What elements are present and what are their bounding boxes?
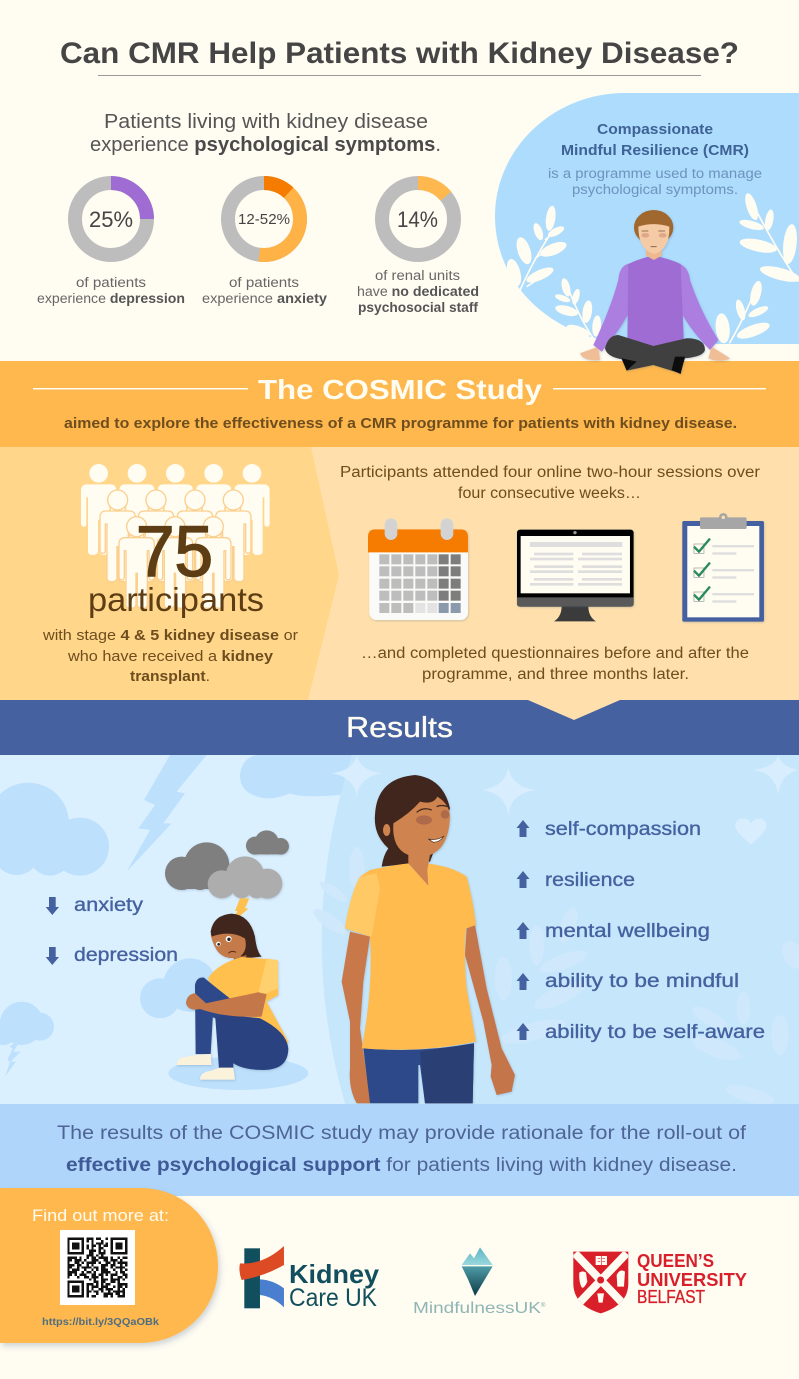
heading: CMR: is a programme used to manage [548, 166, 762, 181]
donut chart: 25% depression [37, 183, 185, 306]
study aim text: aimed to explore the effectiveness of a CMR programme for patients with kidney disease. [64, 415, 737, 432]
heading: CMR: Mindful Resilience (CMR) [561, 143, 749, 159]
panel: find out more [0, 1188, 218, 1343]
right background stars, heart and leaves [310, 755, 799, 1109]
find out more text: Find out more at: [32, 1207, 169, 1225]
heading: CMR: Compassionate [597, 122, 713, 138]
illustration: happy woman [342, 775, 515, 1103]
questionnaires text: …and completed questionnaires before and after the [361, 645, 749, 662]
list: increased outcomes: mental wellbeing [545, 921, 710, 942]
participants description: with stage 4 & 5 kidney disease or [42, 627, 298, 644]
participants description: transplant. [130, 668, 210, 685]
heading: psychological symptoms: experience psychological symptoms. [90, 134, 441, 156]
left background clouds and lightning [0, 755, 367, 1090]
donut chart: 12-52% anxiety: of patients [229, 275, 299, 290]
donut chart: 14% renal units: 14% [397, 207, 438, 232]
knee thigh [200, 978, 241, 1018]
back shin [195, 978, 213, 1054]
participants description: who have received a kidney [67, 648, 274, 665]
QR code [60, 1230, 135, 1305]
storm clouds [165, 830, 289, 899]
donut chart: 14% renal units: psychosocial staff [358, 300, 479, 315]
list: increased outcomes: resilience [545, 870, 635, 891]
hair [634, 210, 673, 245]
list: decreased outcomes [46, 895, 178, 966]
heading: psychological symptoms [90, 111, 441, 156]
icon: up arrow [516, 973, 530, 990]
donut chart: 25% depression: of patients [76, 275, 146, 290]
sessions text: Participants attended four online two-hour sessions over [340, 464, 760, 481]
list: decreased outcomes: anxiety [74, 895, 144, 916]
list: increased outcomes: ability to be mindful [545, 971, 739, 992]
questionnaires text: programme, and three months later. [422, 666, 689, 683]
icon: down arrow [46, 897, 59, 915]
icon: calendar [368, 518, 468, 620]
hands [580, 347, 600, 360]
donut chart: 14% renal units: of renal units [375, 268, 460, 283]
donut chart: 12-52% anxiety [202, 183, 328, 306]
logo: MindfulnessUK: ® [541, 1302, 546, 1309]
number: 75: 75 [136, 513, 213, 592]
panel: results [0, 755, 799, 1109]
panel: conclusion: effective psychological support for patients living with kidney disease. [66, 1155, 737, 1176]
icon: computer monitor [517, 530, 634, 621]
list: increased outcomes: self-compassion [545, 819, 701, 840]
logo: MindfulnessUK: MindfulnessUK [413, 1300, 541, 1317]
arm [186, 992, 267, 1017]
arms [593, 263, 633, 352]
blue blob background [495, 93, 799, 344]
main leg [215, 1013, 288, 1070]
heading: CMR: psychological symptoms. [572, 182, 738, 197]
icon: up arrow [516, 1023, 530, 1040]
logo: Kidney Care UK [239, 1246, 380, 1312]
band: Results heading [0, 700, 799, 755]
heading: The COSMIC Study: The COSMIC Study [258, 374, 542, 405]
icon: leaf sprigs [504, 192, 799, 344]
lightning bolt [232, 898, 249, 923]
face [638, 224, 669, 254]
donut chart: 12-52% anxiety: experience anxiety [202, 291, 328, 306]
illustration: meditating man [580, 210, 730, 374]
torso [627, 256, 684, 347]
heading: CMR [548, 122, 762, 197]
donut chart: 14% renal units: have no dedicated [357, 284, 479, 299]
shirt [208, 957, 288, 1048]
logo: Queen's University Belfast: BELFAST [637, 1287, 705, 1307]
panel: conclusion [0, 1104, 799, 1196]
title: Can CMR Help Patients with Kidney Disease? [60, 37, 739, 70]
legs [605, 335, 705, 373]
icon: down arrow [46, 947, 59, 965]
list: increased outcomes [516, 819, 765, 1043]
icon: up arrow [516, 871, 530, 888]
logo: Kidney Care UK: Care UK [289, 1284, 377, 1312]
donut chart: 25% depression: 25% [89, 207, 133, 232]
icon: up arrow [516, 820, 530, 837]
illustration: distressed woman under clouds [165, 830, 289, 1080]
panel: programme sessions [340, 464, 764, 683]
icon: crowd of people [81, 464, 270, 608]
panel: psychological symptoms [37, 111, 479, 315]
panel: conclusion: The results of the COSMIC study may provide rationale for the roll-out of [57, 1123, 747, 1144]
URL: https://bit.ly/3QQaOBk [42, 1316, 159, 1328]
band: Results heading: Results [346, 712, 453, 744]
logo: Queen's University Belfast: UNIVERSITY [637, 1270, 747, 1290]
donut chart: 14% renal units [357, 183, 479, 315]
logo: Queen's University Belfast [573, 1251, 747, 1313]
head [211, 932, 246, 958]
list: decreased outcomes: depression [74, 945, 178, 966]
questionnaires text [361, 645, 749, 683]
label: participants: participants [88, 581, 264, 618]
list: increased outcomes: ability to be self-aware [545, 1022, 765, 1043]
neck [646, 247, 662, 260]
logo: Queen's University Belfast: QUEEN’S [637, 1251, 714, 1271]
donut chart: 12-52% anxiety: 12-52% [238, 212, 290, 228]
band: The COSMIC Study [0, 361, 799, 447]
heading: psychological symptoms: Patients living with kidney disease [104, 111, 428, 133]
logo: Kidney Care UK: Kidney [289, 1259, 380, 1289]
figure [177, 914, 288, 1080]
logo: MindfulnessUK [413, 1247, 546, 1317]
sessions text: four consecutive weeks… [458, 485, 641, 502]
panel: participants [0, 447, 799, 700]
participants description [42, 627, 298, 685]
panel: CMR definition [495, 93, 799, 344]
icon: up arrow [516, 922, 530, 939]
icon: clipboard checklist [682, 513, 764, 622]
donut chart: 25% depression: experience depression [37, 291, 185, 306]
sessions text [340, 464, 760, 502]
